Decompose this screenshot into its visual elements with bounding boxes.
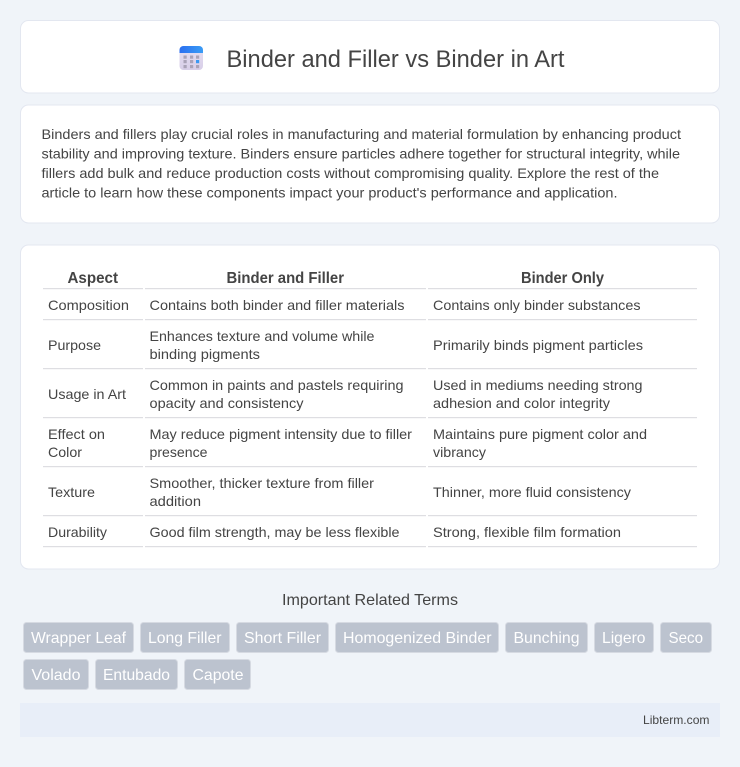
related terms tags	[24, 622, 712, 690]
tag: Bunching: Bunching	[514, 630, 580, 647]
row: effect on color: Maintains pure pigment color and	[433, 426, 647, 442]
row: usage in art: Common in paints and pastels requiring	[150, 377, 404, 393]
intro text: fillers add bulk and reduce production costs without compromising quality. Explore the rest of the	[42, 165, 659, 181]
intro text: stability and improving texture. Binders ensure particles adhere together for structural integrity, while	[42, 146, 680, 162]
row: durability	[48, 524, 621, 540]
row: purpose: Purpose	[48, 337, 101, 353]
row: usage in art	[48, 377, 642, 411]
panel: comparison table	[20, 245, 720, 569]
row: texture: Thinner, more fluid consistency	[433, 484, 631, 500]
tag: Long Filler	[140, 622, 230, 652]
tag: Ligero	[594, 622, 654, 652]
row: composition	[48, 297, 640, 313]
tag: Seco: Seco	[668, 630, 703, 647]
row: effect on color: presence	[150, 444, 208, 460]
row: effect on color: Color	[48, 444, 82, 460]
tag: Seco	[660, 622, 712, 652]
row: durability: Durability	[48, 524, 107, 540]
table header row	[68, 270, 604, 287]
row: usage in art: Usage in Art	[48, 386, 126, 402]
tag: Bunching	[506, 622, 588, 652]
tag: Short Filler	[236, 622, 328, 652]
tag: Entubado: Entubado	[103, 667, 170, 684]
title: Binder and Filler vs Binder in Art	[226, 46, 565, 73]
panel: introduction	[20, 105, 720, 223]
header panel	[20, 20, 720, 93]
table header row: Binder Only	[521, 270, 604, 287]
tag: Homogenized Binder: Homogenized Binder	[343, 630, 492, 647]
tag: Capote	[184, 660, 250, 690]
tag: Long Filler: Long Filler	[148, 630, 222, 647]
row: texture: addition	[150, 493, 201, 509]
row: effect on color	[48, 426, 647, 460]
footer bar	[20, 703, 720, 737]
row: purpose: Primarily binds pigment particles	[433, 337, 643, 353]
row: usage in art: Used in mediums needing strong	[433, 377, 642, 393]
row: composition: Contains only binder substances	[433, 297, 640, 313]
row: purpose: binding pigments	[150, 346, 260, 362]
row: effect on color: vibrancy	[433, 444, 486, 460]
row: composition: Composition	[48, 297, 129, 313]
tag: Homogenized Binder	[336, 622, 498, 652]
table header row: Aspect	[68, 270, 119, 287]
icon: calendar	[180, 46, 203, 70]
row: texture: Texture	[48, 484, 95, 500]
row: durability: Strong, flexible film formation	[433, 524, 621, 540]
row: usage in art: opacity and consistency	[150, 395, 304, 411]
tag: Capote: Capote	[192, 667, 244, 684]
tag: Entubado	[96, 660, 178, 690]
intro text	[42, 126, 681, 200]
tag: Wrapper Leaf: Wrapper Leaf	[31, 630, 127, 647]
footer credit: Libterm.com	[643, 713, 710, 727]
row: texture	[48, 475, 631, 509]
row: composition: Contains both binder and filler materials	[150, 297, 404, 313]
tag: Volado: Volado	[32, 667, 81, 684]
row: usage in art: adhesion and color integrity	[433, 395, 610, 411]
row: purpose	[48, 328, 643, 362]
intro text: Binders and fillers play crucial roles in manufacturing and material formulation by enhancing product	[42, 126, 681, 142]
related terms heading: Important Related Terms	[282, 592, 458, 609]
intro text: article to learn how these components impact your product's performance and application.	[42, 184, 618, 200]
row: effect on color: May reduce pigment intensity due to filler	[150, 426, 412, 442]
tag: Wrapper Leaf	[24, 622, 134, 652]
table header row: Binder and Filler	[226, 270, 344, 287]
row: purpose: Enhances texture and volume while	[150, 328, 375, 344]
row: texture: Smoother, thicker texture from filler	[150, 475, 374, 491]
row: effect on color: Effect on	[48, 426, 105, 442]
row: durability: Good film strength, may be less flexible	[150, 524, 400, 540]
tag: Volado	[24, 660, 88, 690]
tag: Ligero: Ligero	[602, 630, 646, 647]
tag: Short Filler: Short Filler	[244, 630, 322, 647]
